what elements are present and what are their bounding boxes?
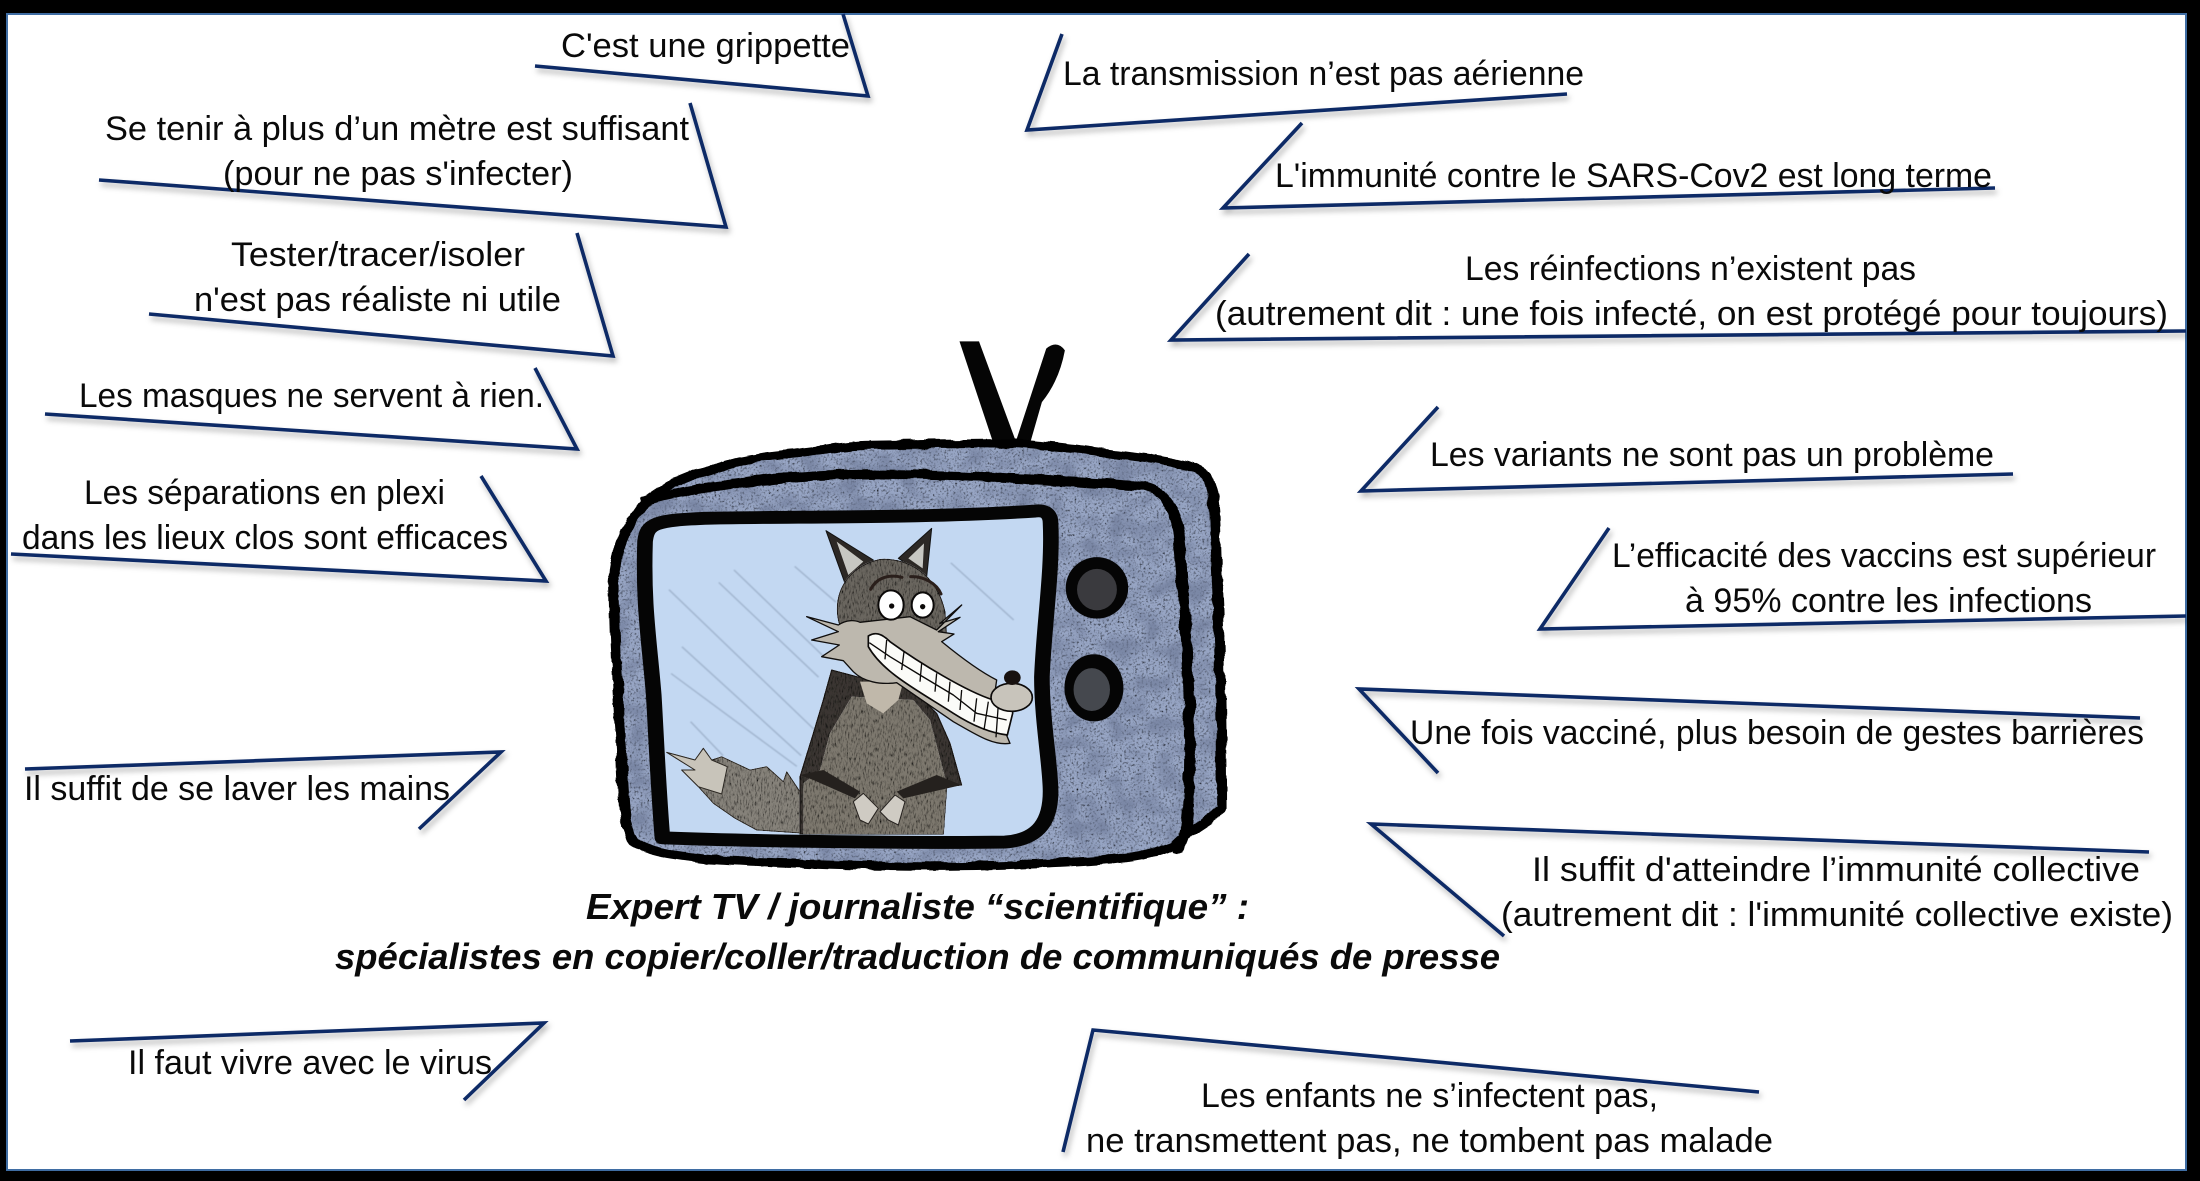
right callout: réinfections bbox=[1215, 250, 2168, 333]
left callout: distance bbox=[105, 110, 690, 193]
right callout: immunité collective bbox=[1501, 851, 2173, 934]
right callout: gestes barrières: Une fois vacciné, plus besoin de gestes barrières bbox=[1410, 714, 2144, 752]
left callout: plexi: Les séparations en plexi bbox=[84, 474, 445, 512]
left callout: mains: Il suffit de se laver les mains bbox=[24, 770, 450, 808]
wolf eyebrows bbox=[871, 576, 941, 594]
left callout: tester tracer isoler bbox=[194, 236, 561, 319]
right callout: immunité collective: (autrement dit : l'immunité collective existe) bbox=[1501, 896, 2173, 934]
wolf face and muzzle bbox=[807, 605, 1010, 744]
wolf nose bbox=[1004, 670, 1021, 685]
left callout: plexi bbox=[22, 474, 508, 557]
right callout: immunité collective: Il suffit d'atteindre l’immunité collective bbox=[1532, 851, 2140, 889]
wolf teeth bbox=[868, 634, 1013, 737]
TV screen bbox=[645, 511, 1051, 842]
left callout: vivre avec le virus: Il faut vivre avec le virus bbox=[128, 1044, 492, 1082]
bottom callout: enfants bbox=[1086, 1077, 1773, 1160]
left callout: grippette: C'est une grippette bbox=[561, 27, 850, 65]
right callout: efficacité des vaccins: à 95% contre les infections bbox=[1685, 582, 2092, 620]
TV outline and frames bbox=[614, 443, 1222, 866]
right callout: immunité: L'immunité contre le SARS-Cov2 est long terme bbox=[1275, 157, 1992, 195]
wolf ears bbox=[826, 528, 932, 583]
wolf tail bbox=[667, 748, 805, 833]
wolf snout bbox=[991, 683, 1032, 711]
right callout: réinfections: (autrement dit : une fois infecté, on est protégé pour toujours) bbox=[1215, 295, 2168, 333]
left callout: tester tracer isoler: n'est pas réaliste ni utile bbox=[194, 281, 561, 319]
right callout: réinfections: Les réinfections n’existent pas bbox=[1465, 250, 1916, 288]
wolf arms bbox=[800, 770, 962, 798]
wolf figure bbox=[800, 528, 1032, 834]
icon: knob bottom bbox=[1064, 654, 1123, 721]
wolf eyes bbox=[878, 590, 934, 620]
TV body shading bbox=[614, 443, 1222, 866]
wolf inner ears bbox=[837, 542, 924, 575]
right callout: efficacité des vaccins: L’efficacité des vaccins est supérieur bbox=[1612, 537, 2156, 575]
right callout: transmission: La transmission n’est pas aérienne bbox=[1063, 55, 1584, 93]
wolf hands bbox=[853, 793, 905, 825]
left callout: distance: Se tenir à plus d’un mètre est suffisant bbox=[105, 110, 690, 148]
wolf collar bbox=[860, 682, 903, 713]
left callout: distance: (pour ne pas s'infecter) bbox=[223, 155, 573, 193]
wolf belly bbox=[803, 697, 947, 834]
right callout: variants: Les variants ne sont pas un problème bbox=[1430, 436, 1994, 474]
bottom callout: enfants: Les enfants ne s’infectent pas, bbox=[1201, 1077, 1658, 1115]
title caption: Expert TV / journaliste “scientifique” : bbox=[586, 886, 1249, 927]
left callout: tester tracer isoler: Tester/tracer/isoler bbox=[231, 236, 525, 274]
TV body bbox=[614, 443, 1222, 866]
left callout: plexi: dans les lieux clos sont efficaces bbox=[22, 519, 508, 557]
right callout: efficacité des vaccins bbox=[1612, 537, 2156, 620]
wolf body bbox=[800, 670, 962, 834]
title caption bbox=[335, 886, 1500, 977]
bottom callout: enfants: ne transmettent pas, ne tombent pas malade bbox=[1086, 1122, 1773, 1160]
wolf head bbox=[837, 559, 947, 637]
screen streaks bbox=[669, 563, 1014, 766]
title caption: spécialistes en copier/coller/traduction de communiqués de presse bbox=[335, 936, 1500, 977]
left callout: masques: Les masques ne servent à rien. bbox=[79, 377, 544, 415]
icon: antenna bbox=[959, 341, 1065, 475]
icon: knob top bbox=[1066, 557, 1128, 619]
television with wolf illustration bbox=[614, 341, 1222, 866]
